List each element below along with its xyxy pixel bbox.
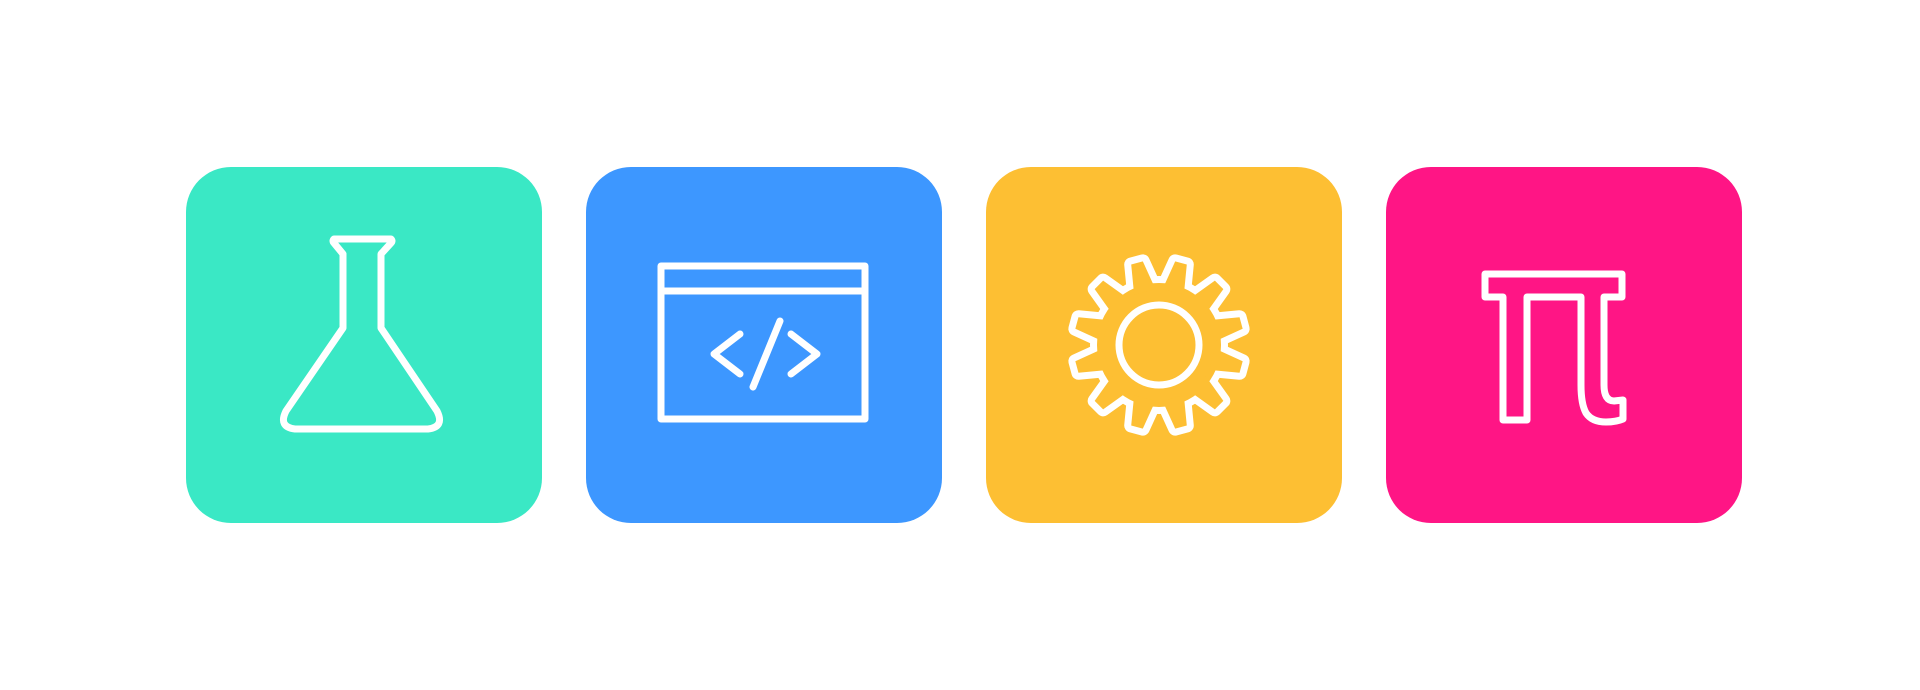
panel: math pi — [1386, 167, 1742, 523]
panel: code — [586, 167, 942, 523]
icon: flask — [283, 239, 440, 429]
panel: engineering gear — [986, 167, 1342, 523]
panel: science flask — [186, 167, 542, 523]
icon: gear — [1074, 260, 1244, 430]
icon: code window — [661, 266, 865, 419]
icon: pi — [1485, 274, 1623, 422]
